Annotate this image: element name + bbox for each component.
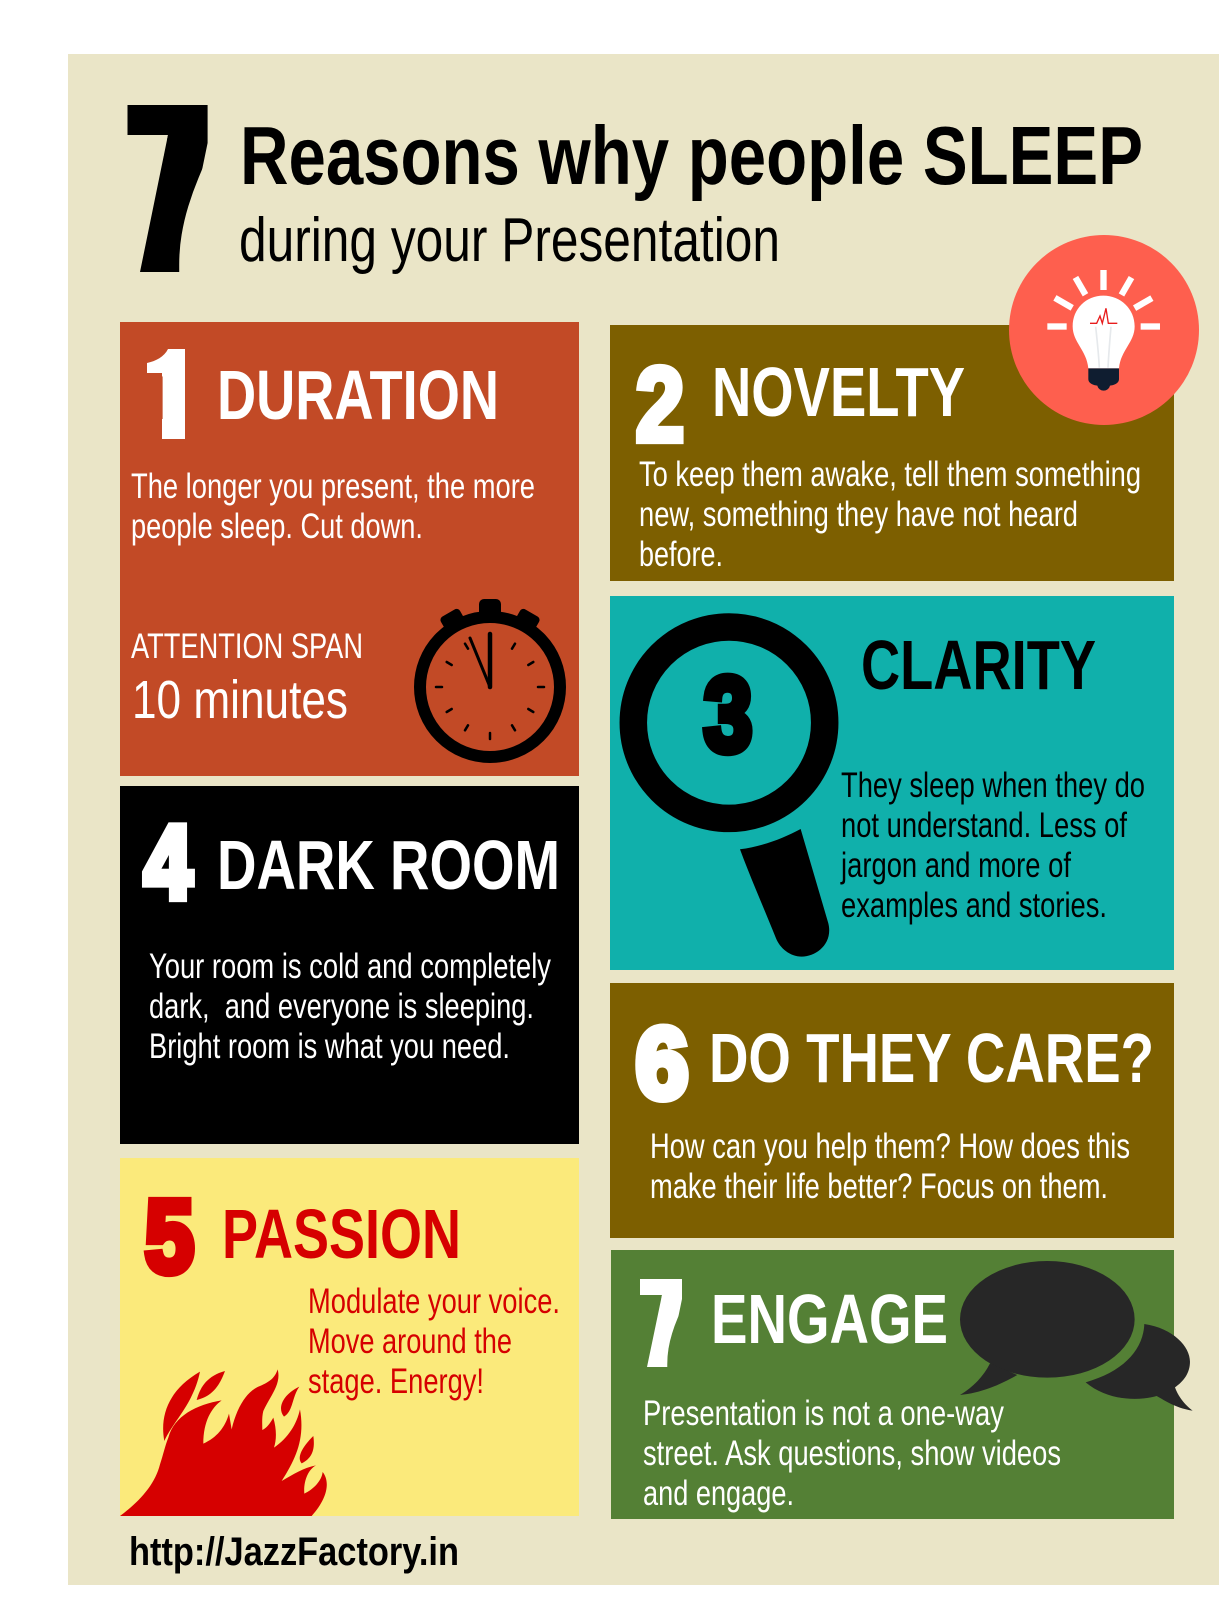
body text	[149, 947, 551, 1066]
heading: novelty: NOVELTY	[712, 353, 965, 431]
heading: duration: DURATION	[217, 356, 499, 434]
body text: stage. Energy!	[308, 1362, 484, 1401]
body text: Bright room is what you need.	[149, 1027, 510, 1066]
heading: clarity: CLARITY	[861, 626, 1096, 704]
body text: Move around the	[308, 1322, 512, 1361]
attention span value: 10 minutes	[132, 670, 348, 730]
number 4: 4	[144, 805, 192, 921]
icon: stopwatch	[420, 599, 560, 757]
heading: engage: ENGAGE	[711, 1280, 948, 1358]
body text: jargon and more of	[840, 846, 1071, 885]
body text: Modulate your voice.	[308, 1282, 560, 1321]
body text: dark, and everyone is sleeping.	[149, 987, 534, 1026]
body text: people sleep. Cut down.	[131, 507, 423, 546]
number 5: 5	[145, 1180, 194, 1295]
body text: street. Ask questions, show videos	[643, 1434, 1061, 1473]
panel: 2 novelty	[610, 325, 1174, 581]
icon: flame	[120, 1369, 327, 1516]
panel: 3 clarity	[610, 596, 1174, 970]
icon: magnifying glass	[633, 627, 829, 957]
number 2: 2	[636, 345, 684, 464]
big number 7: 7	[126, 68, 209, 312]
body text: Your room is cold and completely	[149, 947, 551, 986]
body text: and engage.	[643, 1474, 794, 1513]
body text	[650, 1127, 1130, 1206]
icon: speech bubbles	[960, 1261, 1193, 1411]
icon: light bulb in red circle	[1009, 235, 1199, 425]
footer url: http://JazzFactory.in	[129, 1530, 459, 1574]
body text	[308, 1282, 560, 1401]
body text	[840, 766, 1145, 925]
panel: 1 duration	[120, 322, 579, 776]
body text: They sleep when they do	[841, 766, 1145, 805]
title block	[128, 105, 1141, 274]
panel: 5 passion	[120, 1158, 579, 1516]
heading: passion: PASSION	[222, 1195, 461, 1273]
number 3: 3	[704, 655, 752, 774]
body text: not understand. Less of	[841, 806, 1127, 845]
attention span label: ATTENTION SPAN	[131, 627, 363, 666]
body text: new, something they have not heard	[639, 495, 1078, 534]
number 6: 6	[636, 1006, 688, 1120]
panel: 4 dark room	[120, 786, 579, 1144]
body text: The longer you present, the more	[131, 467, 535, 506]
number 1: 1	[141, 329, 203, 462]
body text	[131, 467, 535, 546]
body text: before.	[639, 535, 723, 574]
number 7: 7	[639, 1261, 683, 1388]
panel: 7 engage	[611, 1250, 1193, 1519]
panel: 6 do they care	[610, 983, 1174, 1238]
body text	[643, 1394, 1061, 1513]
body text	[639, 455, 1141, 574]
body text: Presentation is not a one-way	[643, 1394, 1004, 1433]
body text: examples and stories.	[841, 886, 1107, 925]
heading: dark room: DARK ROOM	[217, 826, 560, 904]
subheading: during your Presentation	[239, 206, 780, 275]
